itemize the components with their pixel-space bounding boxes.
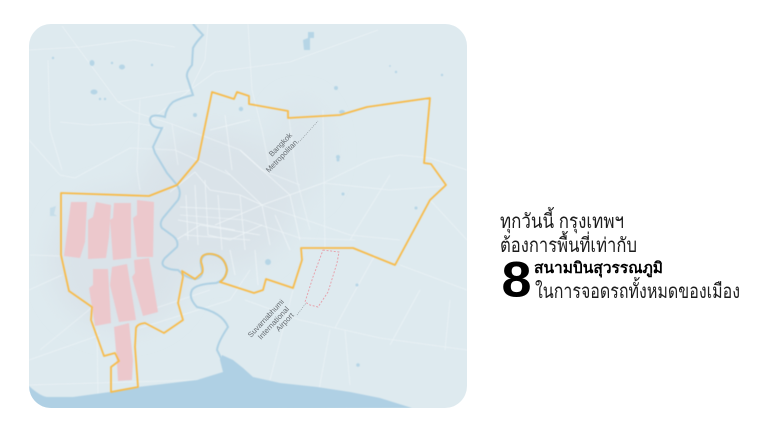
- line 2: ต้องการพื้นที่เท่ากับ: [500, 231, 637, 257]
- block 8: [114, 323, 133, 381]
- map background: [29, 24, 467, 408]
- inner-city roads: [170, 115, 323, 285]
- block 4: [133, 200, 154, 257]
- leader lines: [297, 121, 318, 315]
- label: Suvarnabhumi International Airport: Suvarnabhumi: [246, 297, 286, 339]
- block 5: [89, 269, 111, 326]
- road network: [76, 46, 446, 384]
- block 1: [64, 202, 87, 258]
- line 1: ทุกวันนี้ กรุงเทพฯ: [500, 207, 624, 234]
- block 7: [132, 258, 158, 316]
- label: Bangkok Metropolitan: Bangkok: [267, 131, 294, 158]
- urban area shading: [50, 100, 330, 330]
- water bodies: [50, 32, 443, 367]
- label: Suvarnabhumi International Airport: International: [256, 304, 291, 341]
- line 3 bold: สนามบินสุวรรณภูมิ: [534, 259, 663, 279]
- label: Suvarnabhumi International Airport: Airport: [274, 310, 296, 333]
- block 6: [110, 264, 136, 322]
- airport outline: [305, 250, 339, 307]
- red blocks: 8 Suvarnabhumi airport footprints: [64, 200, 158, 381]
- block 3: [110, 203, 131, 260]
- label: Bangkok Metropolitan: Metropolitan.: [264, 137, 301, 174]
- text block: headline: [500, 207, 740, 308]
- panel: map of Bangkok: [29, 24, 467, 410]
- block 2: [88, 202, 111, 259]
- sea: Gulf of Thailand: [29, 355, 412, 410]
- number 8: 8: [502, 252, 532, 308]
- river: [150, 24, 228, 360]
- Bangkok boundary: [61, 92, 446, 392]
